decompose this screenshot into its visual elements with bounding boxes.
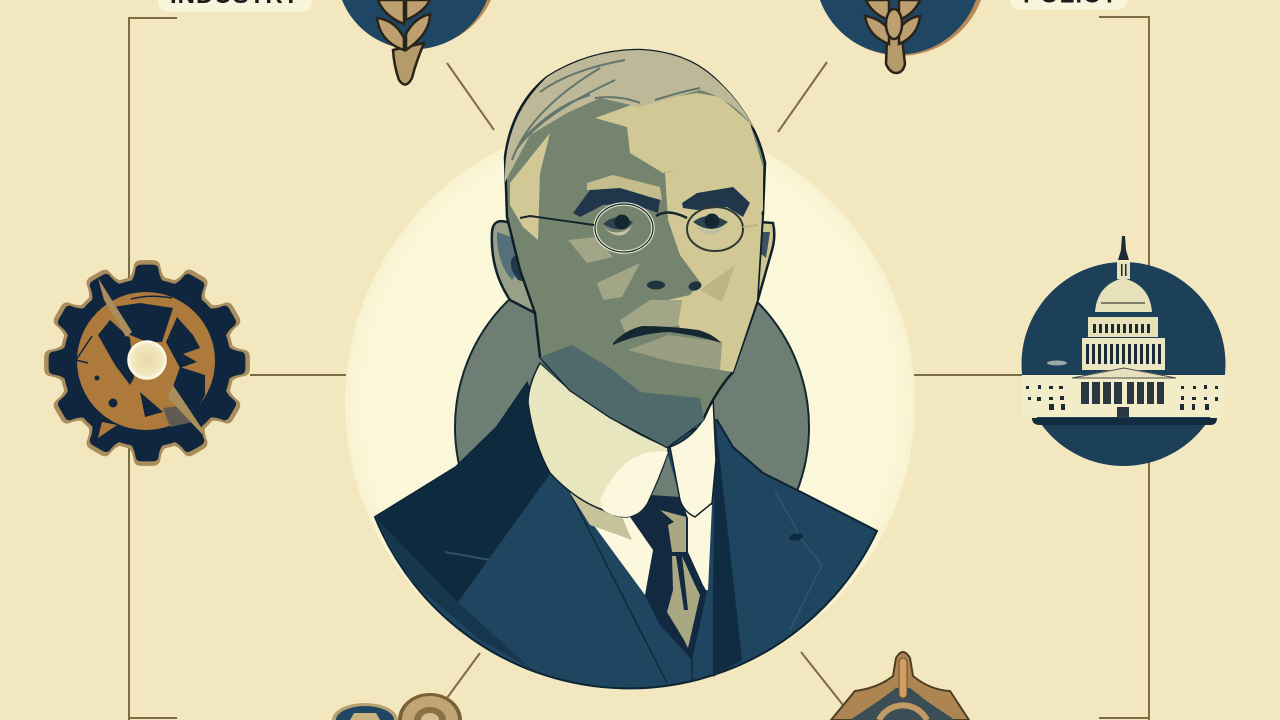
capitol drum xyxy=(1082,338,1165,370)
icon: capitol badge xyxy=(1022,236,1226,466)
icon: wheat badge right xyxy=(820,0,981,73)
capitol spire xyxy=(1118,236,1129,260)
nose xyxy=(647,280,702,292)
ear left xyxy=(492,221,540,313)
neck shadow xyxy=(540,360,716,447)
ear right xyxy=(745,222,774,303)
brow ridge light xyxy=(587,175,662,200)
icon: broken gear xyxy=(46,262,248,464)
label: policy xyxy=(1010,0,1127,10)
gear hub xyxy=(128,341,166,379)
grey backdrop circle xyxy=(455,250,809,604)
icon: wheat badge left xyxy=(342,0,491,85)
label: industry xyxy=(158,0,312,12)
portrait medallion xyxy=(345,50,915,688)
shirt xyxy=(570,493,712,595)
jaw shade xyxy=(540,345,704,447)
capitol portico xyxy=(1072,367,1176,417)
capitol dome xyxy=(1095,278,1152,312)
capitol wings xyxy=(1022,375,1225,417)
jacket xyxy=(375,383,877,688)
icon: helmet badge bottom right xyxy=(831,652,969,720)
gear ring xyxy=(77,292,215,430)
face base xyxy=(505,50,765,447)
gear cracks xyxy=(98,303,205,418)
icon: cog badge bottom left xyxy=(332,693,462,720)
cheek patches xyxy=(568,237,613,263)
connector lines xyxy=(129,17,1149,720)
head xyxy=(492,50,774,447)
brows xyxy=(573,188,660,217)
gear damage xyxy=(163,405,193,427)
capitol base xyxy=(1032,418,1217,425)
necktie xyxy=(630,455,707,660)
right face light xyxy=(665,170,762,372)
mouth xyxy=(613,326,721,345)
hair xyxy=(505,50,755,182)
gear spike xyxy=(98,278,132,337)
temple light xyxy=(510,133,550,240)
forehead light xyxy=(595,93,763,222)
eyes xyxy=(603,214,728,236)
collar xyxy=(528,363,716,517)
glasses xyxy=(520,204,758,252)
halo circle xyxy=(345,118,915,688)
